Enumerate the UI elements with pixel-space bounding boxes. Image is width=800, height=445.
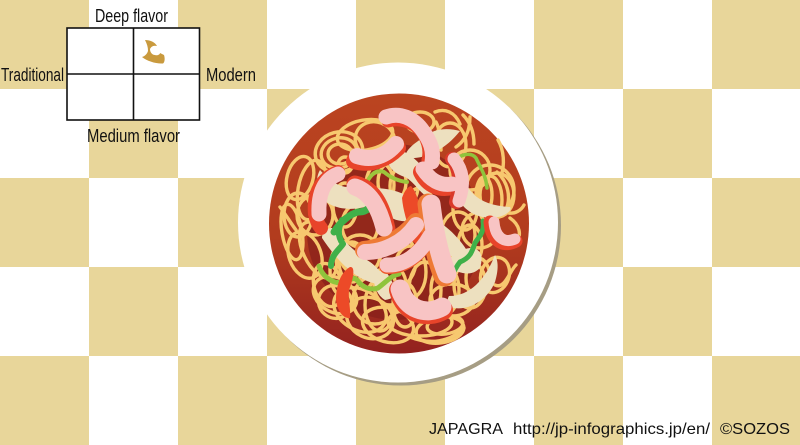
flavor matrix chart [1, 6, 256, 146]
orange and red undersides [315, 120, 516, 314]
axis label: modern: Modern [206, 65, 256, 85]
red peppers [336, 186, 430, 318]
pink ham [319, 115, 515, 311]
noodles [277, 110, 524, 348]
ham strips [315, 115, 516, 314]
plate of pasta [238, 62, 561, 386]
axis label: deep flavor: Deep flavor [95, 6, 168, 26]
axis label: medium flavor: Medium flavor [87, 126, 180, 146]
icon: noodle marker [142, 40, 165, 64]
quadrant grid [67, 28, 200, 120]
credit: url: http://jp-infographics.jp/en/ [513, 421, 711, 438]
white plate [238, 62, 558, 382]
credit: copyright: ©SOZOS [720, 421, 790, 438]
sauce [269, 94, 529, 354]
plate shadow [241, 66, 561, 386]
onion slices [317, 129, 511, 308]
credit line [429, 421, 790, 438]
green peppers [319, 154, 487, 289]
axis label: traditional: Traditional [1, 65, 64, 85]
credit: japagra: JAPAGRA [429, 421, 503, 438]
